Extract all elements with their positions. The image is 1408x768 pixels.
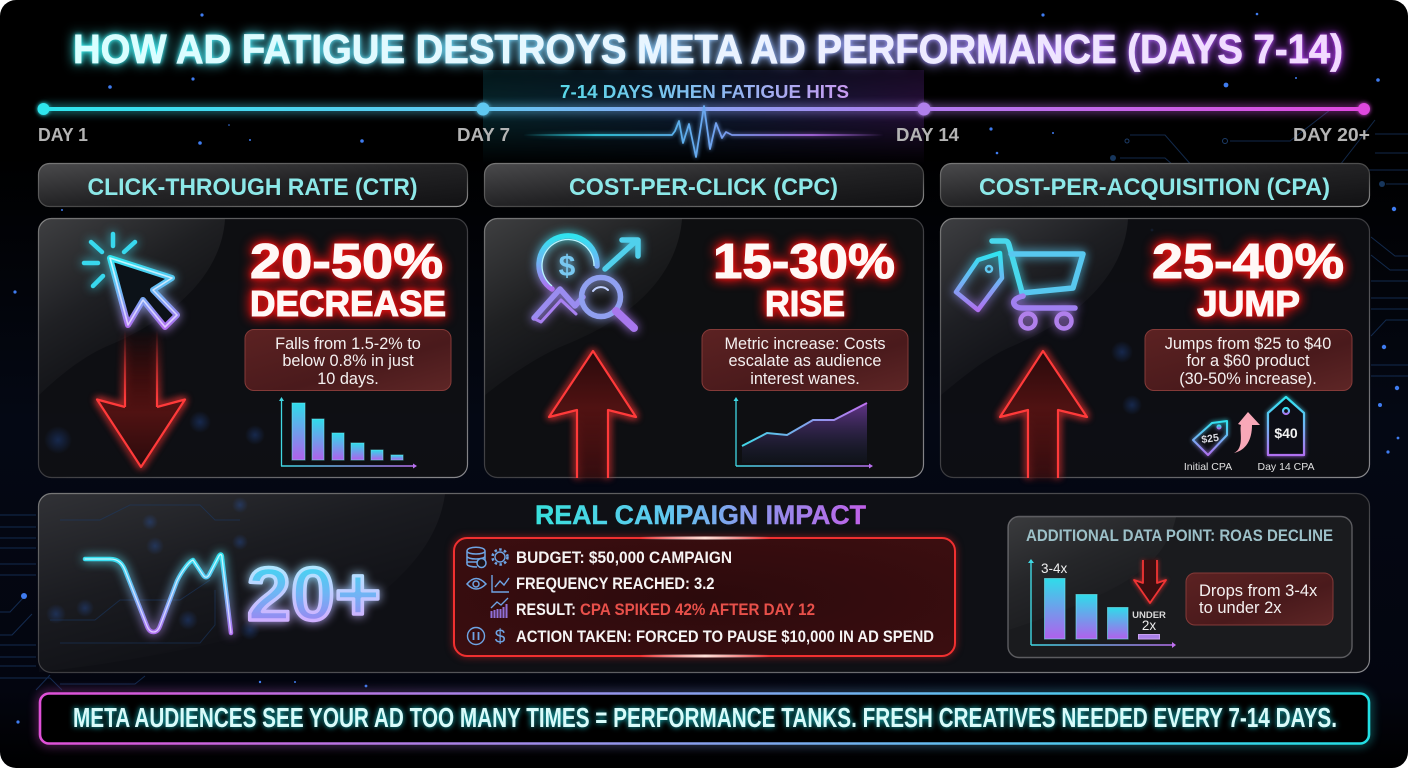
callout: to under 2x xyxy=(1199,599,1282,617)
callout: interest wanes. xyxy=(750,370,860,388)
frequency row: FREQUENCY REACHED: 3.2 xyxy=(516,574,714,593)
bar chart: ROAS: 2x xyxy=(1142,618,1156,633)
stat: 25-40% jump: 25-40% xyxy=(1152,235,1344,289)
metric header: CPC xyxy=(484,164,924,206)
icon: shopping cart with tag xyxy=(956,241,1083,328)
stat: 20+: 20+ xyxy=(247,552,381,636)
callout xyxy=(245,330,451,390)
day labels: DAY 1 xyxy=(38,124,88,145)
panel: CPC xyxy=(484,218,924,478)
icon: dollar coin, trend and magnifier xyxy=(534,236,638,328)
icon: database xyxy=(467,547,486,568)
panel: real campaign impact xyxy=(38,494,1370,672)
heartbeat line xyxy=(523,106,884,157)
icon: $25 tag xyxy=(1193,421,1227,455)
icon: dollar coin, trend and magnifier: $ xyxy=(559,250,576,283)
bottom banner xyxy=(40,694,1369,744)
callout: Falls from 1.5-2% to xyxy=(275,335,421,353)
icon: pause xyxy=(468,628,484,644)
stat: 15-30% rise: RISE xyxy=(765,283,845,324)
fatigue window band xyxy=(483,70,924,165)
price tags comparison: $25 xyxy=(1201,432,1220,446)
metric header: CTR: CLICK-THROUGH RATE (CTR) xyxy=(88,174,418,201)
result row: CPA SPIKED 42% AFTER DAY 12 xyxy=(580,600,815,619)
panel: ROAS decline xyxy=(1008,516,1352,658)
icon: eye xyxy=(467,578,486,589)
callout: for a $60 product xyxy=(1186,352,1310,370)
callout xyxy=(1186,573,1333,625)
timeline line xyxy=(43,107,1364,111)
icon: performance squiggle xyxy=(85,555,231,633)
callout xyxy=(702,330,908,390)
callout: Drops from 3-4x xyxy=(1199,582,1318,600)
callout xyxy=(1145,330,1352,390)
callout: Metric increase: Costs xyxy=(724,335,886,353)
metric header: CPC: COST-PER-CLICK (CPC) xyxy=(569,174,838,201)
bar chart: ROAS: 3-4x xyxy=(1041,561,1068,576)
timeline xyxy=(38,70,1370,165)
action row: ACTION TAKEN: FORCED TO PAUSE $10,000 IN AD SPEND xyxy=(516,627,934,646)
icon: red up arrow xyxy=(549,351,636,478)
day labels: DAY 14 xyxy=(896,124,960,145)
icon: red down arrow xyxy=(97,330,185,467)
bar chart: ROAS: UNDER xyxy=(1132,610,1166,621)
result row: RESULT: xyxy=(516,600,576,619)
icon: $40 tag xyxy=(1268,397,1304,455)
stat: 20-50% decrease: DECREASE xyxy=(250,283,446,324)
day labels xyxy=(38,124,1370,145)
panel: CPA xyxy=(940,218,1370,478)
area chart: CPC rise xyxy=(734,397,873,468)
metric header: CTR xyxy=(38,164,468,206)
stat: 25-40% jump xyxy=(1152,235,1344,324)
circuit lines xyxy=(0,110,1408,690)
icon: gear xyxy=(492,550,508,564)
icon: cursor xyxy=(84,234,177,327)
bar chart: CTR decline xyxy=(279,397,417,468)
icon: growth bars xyxy=(491,598,508,618)
title: HOW AD FATIGUE DESTROYS META AD PERFORMANCE (DAYS 7-14) xyxy=(73,26,1343,72)
price tags comparison: Day 14 CPA xyxy=(1258,461,1314,473)
heading: REAL CAMPAIGN IMPACT xyxy=(535,500,866,530)
callout: below 0.8% in just xyxy=(282,352,414,370)
window label: 7-14 DAYS WHEN FATIGUE HITS xyxy=(560,82,849,102)
budget row: BUDGET: $50,000 CAMPAIGN xyxy=(516,548,732,567)
icon: line chart xyxy=(492,575,509,592)
icon: red up arrow xyxy=(1000,351,1087,478)
callout: (30-50% increase). xyxy=(1179,370,1317,388)
callout: 10 days. xyxy=(317,370,379,388)
icon: rising arrow xyxy=(1234,412,1260,453)
timeline nodes xyxy=(38,102,1370,116)
stat: 20-50% decrease xyxy=(250,235,446,324)
stat: 20-50% decrease: 20-50% xyxy=(250,235,443,289)
price tags comparison xyxy=(1184,397,1314,473)
bar chart: ROAS xyxy=(1028,559,1176,648)
stat: 25-40% jump: JUMP xyxy=(1197,283,1300,324)
day labels: DAY 20+ xyxy=(1293,124,1370,145)
stat: 15-30% rise xyxy=(713,235,895,324)
metric header: CPA xyxy=(940,164,1370,206)
icon: red down arrow xyxy=(1134,560,1166,603)
icon: dollar: $ xyxy=(495,627,506,648)
stat: 15-30% rise: 15-30% xyxy=(713,235,895,289)
price tags comparison: $40 xyxy=(1274,425,1298,441)
callout: Jumps from $25 to $40 xyxy=(1165,335,1331,353)
panel: CTR xyxy=(38,218,468,478)
callout: escalate as audience xyxy=(729,352,881,370)
metric header: CPA: COST-PER-ACQUISITION (CPA) xyxy=(979,174,1330,201)
day labels: DAY 7 xyxy=(457,124,510,145)
heading: ADDITIONAL DATA POINT: ROAS DECLINE xyxy=(1026,526,1333,545)
case study box xyxy=(454,536,955,658)
price tags comparison: Initial CPA xyxy=(1184,461,1232,473)
